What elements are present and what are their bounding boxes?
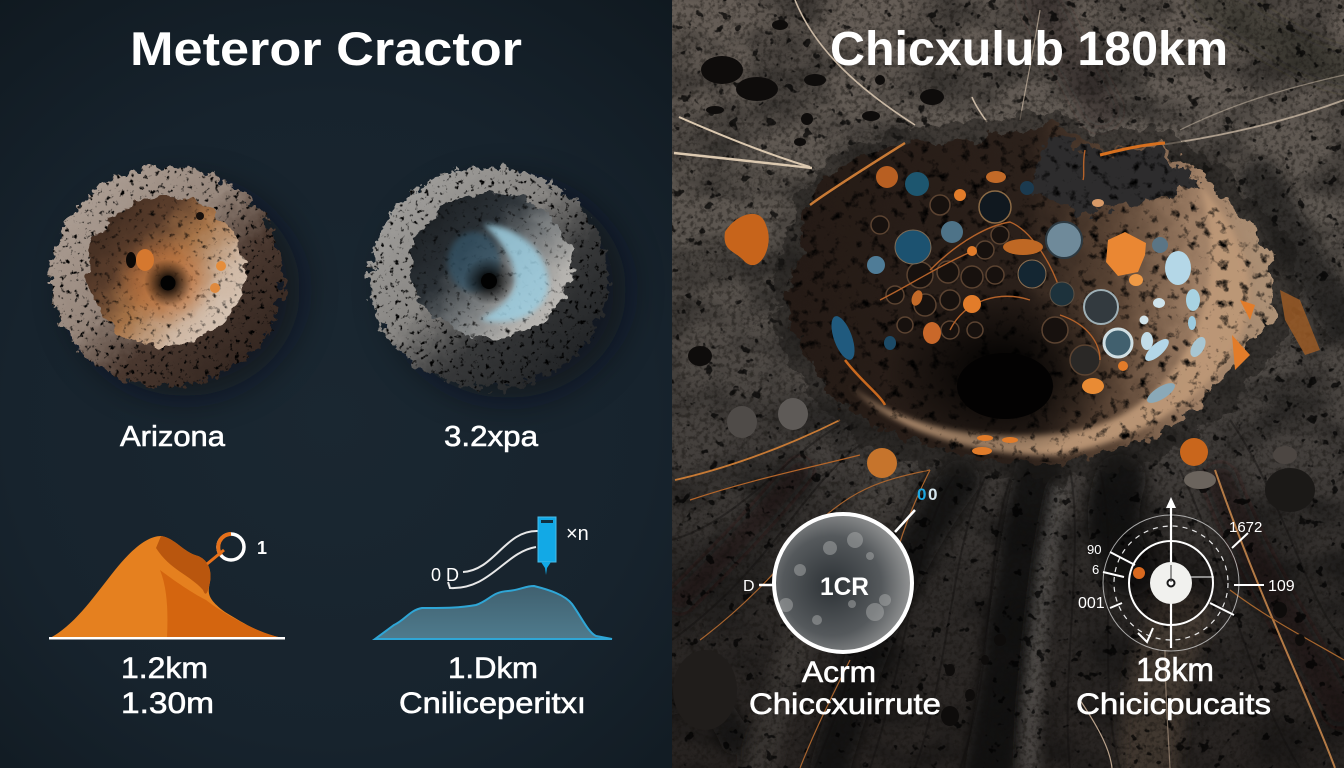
chart: radial scale gauge [1078,497,1295,651]
orange veins inside crater [810,143,1165,405]
funnel shadow [908,302,1109,452]
rock flow streaks [672,0,1344,768]
stat: 1.Dkm: 1.Dkm [448,652,538,685]
icon: blue probe with leads [448,517,556,588]
scattered rock pits [673,20,1315,730]
pointer to D [759,584,774,586]
label: 18km: 18km [1136,651,1214,688]
icon: blue profile mound [375,586,612,639]
label: 90: 90 [1087,542,1101,557]
crater rim debris [775,108,1300,484]
image: Arizona crater [51,167,300,396]
lower tan rim band [850,185,1249,455]
stat: Cniliceperitxı: Cniliceperitxı [399,687,586,720]
surface cracks and orange veins [674,0,1344,768]
crater bowl [783,123,1273,463]
label: 3.2xpa: 3.2xpa [444,421,539,453]
label: 6: 6 [1092,562,1099,577]
image: 3.2xpa crater [370,167,626,398]
label: mound ring value: 1 [257,538,267,558]
image: Chicxulub crater [725,108,1320,484]
icon: orange profile mound [49,534,285,640]
label: probe lower value: 0 D [431,565,459,585]
label: Chicicpucaits: Chicicpucaits [1076,688,1271,721]
title: Meteror Cractor: Meteror Cractor [130,22,522,75]
panel: Meteor Crater (left) [0,0,672,768]
label: probe top value: ×n [566,523,589,545]
label: 00 [918,488,937,500]
label: Arizona: Arizona [120,421,226,453]
central black hole [957,353,1053,419]
label: 109: 109 [1268,578,1295,595]
pointer to 00 [895,510,915,532]
label: 00: 0 [917,485,926,504]
blue water-filled cavities [827,172,1209,407]
upper rock shelf [1030,135,1200,215]
bowl texture [783,123,1273,463]
flowing rock strands [672,420,1344,768]
callout: magnified sample 1CR [743,485,937,652]
stat: 1.30m: 1.30m [121,687,214,720]
label: Chiccxuirrute: Chiccxuirrute [749,688,941,721]
panel: Chicxulub (right) [672,0,1344,768]
label: 00: 0 [928,485,937,504]
orange mineral nodules [725,166,1320,478]
stat: 1.2km: 1.2km [121,652,208,685]
label: 1672: 1672 [1229,519,1262,536]
dark cells [871,195,1100,375]
title: Chicxulub 180km: Chicxulub 180km [830,23,1228,76]
label: D: D [743,578,755,595]
label: Acrm: Acrm [802,656,876,689]
label: 001: 001 [1078,595,1105,612]
icon: ring marker [207,534,244,564]
label: 1CR: 1CR [820,573,869,601]
